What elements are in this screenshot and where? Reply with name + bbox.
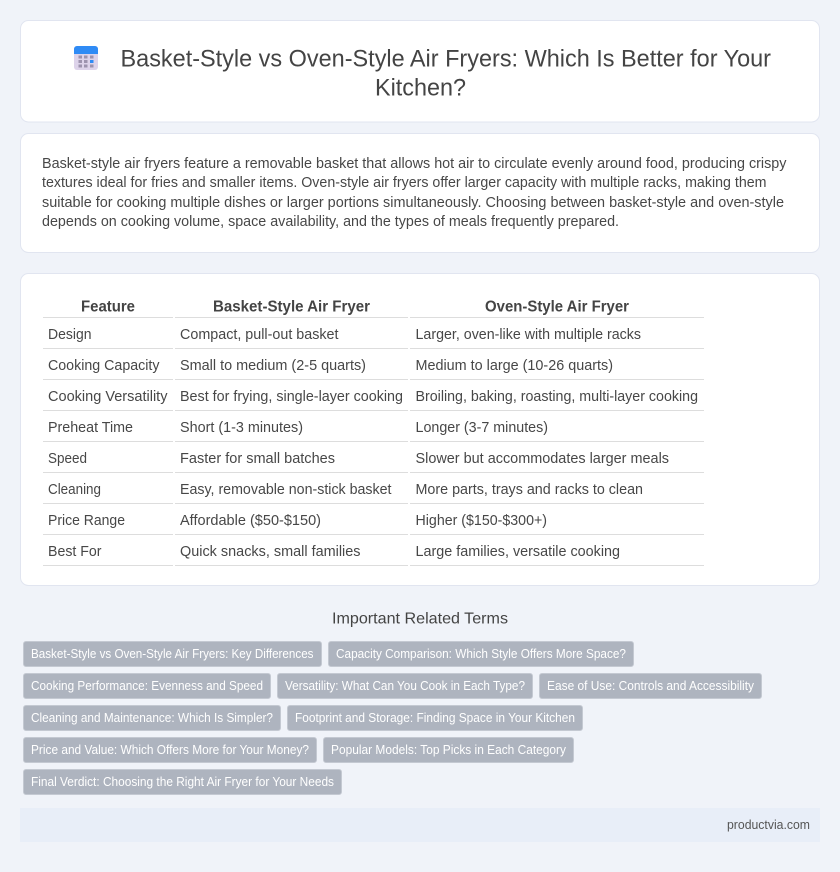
- tag: capacity comparison: Capacity Comparison: Which Style Offers More Space?: [336, 647, 626, 661]
- row: cleaning: [48, 481, 643, 498]
- tag: cooking performance: [24, 674, 270, 698]
- row: cleaning: Cleaning: [48, 481, 101, 498]
- tag: ease of use: Ease of Use: Controls and Accessibility: [547, 679, 755, 693]
- title: Basket-Style vs Oven-Style Air Fryers: Which Is Better for Your: [120, 46, 771, 72]
- tag: cooking performance: Cooking Performance: Evenness and Speed: [31, 679, 263, 693]
- row: speed: Faster for small batches: [180, 450, 335, 467]
- tag: final verdict: [24, 770, 342, 794]
- table rules: [43, 317, 704, 566]
- tag: footprint and storage: [288, 706, 582, 730]
- row: cleaning: More parts, trays and racks to clean: [416, 481, 643, 498]
- tag: versatility: [278, 674, 532, 698]
- panel: title header: [20, 20, 820, 122]
- title: [120, 46, 771, 102]
- row: speed: Slower but accommodates larger meals: [416, 450, 669, 467]
- intro text: [42, 155, 787, 230]
- intro text: textures ideal for fries and smaller items. Oven-style air fryers offer larger capacity with multiple racks, making them: [42, 174, 766, 191]
- intro text: Basket-style air fryers feature a removable basket that allows hot air to circulate evenly around food, producing crispy: [42, 155, 787, 172]
- footer source text: productvia.com: [727, 817, 810, 832]
- row: best for: Large families, versatile cooking: [416, 543, 620, 560]
- row: cooking versatility: Best for frying, single-layer cooking: [180, 388, 403, 405]
- tag: popular models: [324, 738, 574, 762]
- row: cooking capacity: Small to medium (2-5 quarts): [180, 357, 366, 374]
- row: price range: [48, 512, 547, 529]
- tag: versatility: Versatility: What Can You Cook in Each Type?: [285, 679, 525, 693]
- row: best for: [48, 543, 620, 560]
- row: price range: Price Range: [48, 512, 125, 529]
- tag: cleaning and maintenance: Cleaning and Maintenance: Which Is Simpler?: [31, 711, 273, 725]
- row: speed: [48, 450, 669, 467]
- row: speed: Speed: [48, 450, 87, 467]
- tag: popular models: Popular Models: Top Picks in Each Category: [331, 743, 567, 757]
- panel: introduction: [20, 134, 820, 252]
- row: preheat time: Longer (3-7 minutes): [416, 419, 548, 436]
- row: cooking capacity: Medium to large (10-26 quarts): [416, 357, 613, 374]
- row: cooking versatility: Cooking Versatility: [48, 388, 168, 405]
- tag: footprint and storage: Footprint and Storage: Finding Space in Your Kitchen: [295, 711, 575, 725]
- footer bar: [20, 808, 820, 842]
- heading: important related terms: Important Related Terms: [332, 610, 508, 628]
- icon: calendar: [74, 46, 98, 70]
- row: price range: Higher ($150-$300+): [416, 512, 547, 529]
- table header row: Feature: [81, 298, 135, 316]
- tag: key differences: Basket-Style vs Oven-Style Air Fryers: Key Differences: [31, 647, 314, 661]
- row: price range: Affordable ($50-$150): [180, 512, 321, 529]
- row: design: Design: [48, 326, 92, 343]
- row: cleaning: Easy, removable non-stick basket: [180, 481, 392, 498]
- tag: price and value: [24, 738, 316, 762]
- row: best for: Best For: [48, 543, 102, 560]
- tag group: related terms: [24, 642, 762, 794]
- row: cooking capacity: Cooking Capacity: [48, 357, 160, 374]
- row: design: Compact, pull-out basket: [180, 326, 339, 343]
- tag: ease of use: [540, 674, 762, 698]
- panel: comparison table: [20, 274, 820, 586]
- intro text: depends on cooking volume, space availability, and the types of meals frequently prepared.: [42, 213, 619, 230]
- row: best for: Quick snacks, small families: [180, 543, 360, 560]
- row: cooking capacity: [48, 357, 613, 374]
- row: preheat time: Short (1-3 minutes): [180, 419, 303, 436]
- row: preheat time: [48, 419, 548, 436]
- title: Kitchen?: [375, 74, 466, 102]
- row: cooking versatility: [48, 388, 698, 405]
- tag: final verdict: Final Verdict: Choosing the Right Air Fryer for Your Needs: [31, 775, 334, 789]
- intro text: suitable for cooking multiple dishes or larger portions simultaneously. Choosing between basket-style and oven-style: [42, 194, 784, 211]
- table header row: Basket-Style Air Fryer: [213, 298, 370, 316]
- tag: capacity comparison: [328, 642, 634, 666]
- table header row: Oven-Style Air Fryer: [485, 298, 629, 316]
- tag: key differences: [24, 642, 322, 666]
- tag: cleaning and maintenance: [24, 706, 280, 730]
- row: design: [48, 326, 641, 343]
- row: cooking versatility: Broiling, baking, roasting, multi-layer cooking: [416, 388, 698, 405]
- table header row: [81, 298, 629, 316]
- row: preheat time: Preheat Time: [48, 419, 133, 436]
- tag: price and value: Price and Value: Which Offers More for Your Money?: [31, 743, 309, 757]
- row: design: Larger, oven-like with multiple racks: [416, 326, 641, 343]
